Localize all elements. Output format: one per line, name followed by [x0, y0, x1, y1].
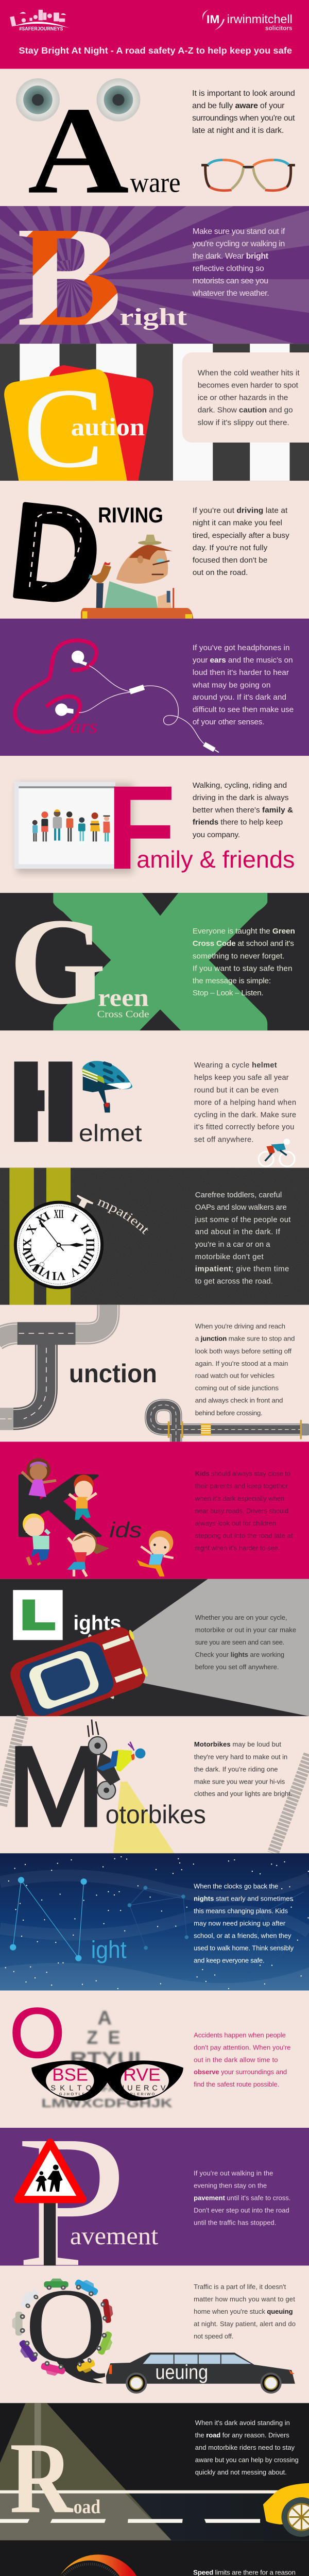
text block: matter how much you want to get — [194, 2295, 295, 2303]
text block: the dark. Wear bright — [193, 252, 269, 261]
blurred eye chart: Z E — [87, 2027, 120, 2048]
text block: nights start early and sometimes — [194, 1894, 293, 1902]
text block: If you've got headphones in — [193, 643, 289, 652]
heading: Lights — [13, 1590, 121, 1640]
text block: stepping out into the road late at — [195, 1532, 293, 1539]
heading: Impatient — [48, 1179, 148, 1257]
text block: driving in the dark is always — [193, 793, 289, 802]
text block: near busy roads. Drivers should — [195, 1507, 288, 1515]
icon: clock: X — [24, 1223, 40, 1236]
text block: you're cycling or walking in — [193, 240, 285, 248]
text block: not speed off. — [194, 2332, 233, 2340]
text block: Traffic is a part of life, it doesn't — [194, 2283, 286, 2291]
logo: irwinmitchell: IM — [207, 13, 219, 26]
constellation: N — [10, 1877, 304, 1973]
heading: Lights: ights — [73, 1611, 121, 1635]
icon: clock: V — [67, 1264, 81, 1279]
text block: When the clocks go back the — [194, 1882, 278, 1890]
icon: cycle helmet — [82, 1061, 132, 1112]
text block — [192, 643, 294, 726]
text block: impatient; give them time — [195, 1265, 289, 1274]
heading: Bright — [17, 197, 187, 356]
heading: Green Cross Code: reen — [98, 984, 149, 1011]
text block: until the traffic has stopped. — [194, 2219, 276, 2226]
panel: L lights — [0, 1579, 309, 1729]
text block: day. If you're not fully — [193, 544, 268, 552]
text block: Make sure you stand out if — [193, 227, 285, 236]
text block: Check your lights are working — [195, 1651, 284, 1658]
text block — [192, 227, 285, 298]
text block: Motorbikes may be loud but — [194, 1740, 281, 1748]
panel: Q queuing — [0, 2266, 309, 2403]
logo: safer journeys — [10, 10, 70, 32]
heading: Driving: RIVING — [98, 503, 163, 527]
text block: school, or at a friends, when they — [194, 1932, 291, 1940]
text block: Don't ever step out into the road — [194, 2207, 289, 2214]
text block — [194, 2031, 290, 2088]
icon: clock — [14, 1201, 104, 1289]
text block: motorbike don't get — [195, 1253, 264, 1261]
illustration: roads — [0, 1305, 307, 1442]
text block: night it can make you feel — [193, 519, 282, 528]
heading: Caution — [23, 365, 145, 492]
text block: you're in a car or on a — [195, 1241, 270, 1249]
heading: Road: R — [10, 2422, 74, 2535]
icon: clock: XII — [54, 1208, 64, 1221]
icon: clock: XI — [34, 1209, 53, 1227]
text block: road watch out for vehicles — [195, 1372, 274, 1380]
text block: quickly and not messing about. — [195, 2468, 287, 2476]
text block: observe your surroundings and — [194, 2068, 287, 2076]
text block: Walking, cycling, riding and — [193, 781, 287, 790]
heading: Pavement: P — [16, 2097, 127, 2307]
text block — [194, 1882, 294, 1964]
illustration: seven people — [32, 809, 110, 841]
icon: cat-eye glasses with sharp text: PLERIWO — [130, 2092, 154, 2096]
heading: Lights: L — [21, 1594, 55, 1637]
text block: look both ways before setting off — [195, 1347, 291, 1355]
panel: C caution — [0, 344, 309, 492]
callout: becomes even harder to spot — [198, 381, 299, 390]
icon: cyclist — [259, 1139, 295, 1166]
heading: Night: ight — [91, 1937, 127, 1963]
icon: clock: II — [78, 1222, 94, 1237]
icon: clock: VII — [32, 1261, 55, 1282]
text block — [194, 2283, 296, 2340]
heading: Kids: K — [12, 1457, 101, 1555]
heading: ueuing: ueuing — [156, 2361, 208, 2383]
callout — [182, 352, 309, 443]
heading: Motorbikes: otorbikes — [106, 1800, 206, 1829]
panel: B bright — [0, 206, 309, 344]
text block: this means changing plans. Kids — [194, 1907, 288, 1914]
icon: cat-eye glasses with sharp text: IUERCV — [122, 2084, 166, 2092]
heading: Helmet: elmet — [79, 1120, 142, 1146]
text block: night when it's harder to see. — [195, 1544, 280, 1552]
icon: clock: IX — [21, 1238, 35, 1251]
title: Stay Bright At Night - A road safety A-Z to help keep you safe — [19, 45, 292, 56]
text block: reflective clothing so — [193, 264, 264, 273]
illustration: headlight on road — [0, 2403, 309, 2540]
text block: out in the dark allow time to — [194, 2056, 278, 2063]
heading: Green Cross Code: G — [9, 893, 106, 1030]
icon: clock: III — [83, 1238, 97, 1252]
panel: P pavement — [0, 2097, 309, 2307]
text block: round but it can be even — [194, 1086, 279, 1094]
illustration: ring of cars — [12, 2276, 115, 2378]
text block: Accidents happen when people — [194, 2031, 286, 2039]
heading: Road: oad — [74, 2496, 100, 2518]
text block: behind before crossing. — [195, 1409, 263, 1417]
text block: whatever the weather. — [192, 289, 269, 298]
logo: irwinmitchell: solicitors — [265, 25, 293, 32]
blurred eye chart: LMWXCDFGHJK — [41, 2096, 173, 2110]
icon: clock: VI — [52, 1269, 65, 1282]
icon: cat-eye glasses with sharp text — [31, 2060, 183, 2100]
text block: a junction make sure to stop and — [195, 1335, 295, 1343]
panel: J junction — [0, 1305, 309, 1442]
heading: Driving: D — [4, 475, 107, 633]
heading letter Q: Q — [25, 2267, 107, 2385]
icon: cat-eye glasses with sharp text: RVE — [123, 2065, 161, 2085]
text block: to get across the road. — [195, 1278, 273, 1286]
heading: Aware — [28, 81, 181, 220]
header — [0, 0, 309, 69]
heading: Helmet: H — [8, 1042, 79, 1165]
text block: Everyone is taught the Green — [193, 927, 295, 936]
text block: Stop – Look – Listen. — [193, 989, 264, 997]
text block: home when you're stuck queuing — [194, 2308, 293, 2315]
text block — [192, 89, 295, 135]
text block: the dark. If you're riding one — [194, 1766, 278, 1773]
text block: cycling in the dark. Make sure — [194, 1111, 296, 1119]
text block — [193, 506, 289, 577]
text block: aware but you can help by crossing — [195, 2456, 299, 2464]
text block: sure you are seen and can see. — [195, 1638, 284, 1646]
text block: of your other senses. — [193, 718, 265, 726]
text block — [193, 781, 293, 839]
text block: and motorbike riders need to stay — [195, 2444, 295, 2451]
logo: irwinmitchell — [202, 10, 293, 32]
text block: pavement until it's safe to cross. — [194, 2194, 290, 2202]
text block: Kids should always stay close to — [195, 1470, 290, 1478]
panel: R road — [0, 2403, 309, 2540]
text block: friends there to help keep — [193, 818, 283, 827]
text block: and keep everyone safe. — [194, 1957, 265, 1964]
text block: When it's dark avoid standing in — [195, 2419, 290, 2427]
panel: S speed — [0, 2540, 309, 2576]
text block: OAPs and slow walkers are — [195, 1204, 287, 1212]
icon: speedometer — [53, 2554, 143, 2576]
text block: tired, especially after a busy — [193, 531, 289, 540]
text block — [195, 1323, 295, 1417]
heading: Green Cross Code: Cross Code — [97, 1009, 149, 1020]
text block: may now need picking up after — [194, 1920, 286, 1927]
text block: before you set off anywhere. — [195, 1663, 279, 1671]
text block: If you want to stay safe then — [193, 964, 292, 973]
heading: Impatient: mpatient — [97, 1199, 148, 1234]
text block: their parents and keep together — [195, 1482, 288, 1490]
text block: difficult to see then make use — [193, 705, 294, 714]
panel: I impatient — [0, 1154, 309, 1325]
heading: Caution: aution — [71, 413, 145, 441]
heading: Motorbikes — [7, 1723, 206, 1850]
text block: out on the road. — [193, 568, 248, 577]
heading: Caution: C — [23, 365, 104, 492]
stars — [6, 1857, 308, 1989]
callout: dark. Show caution and go — [198, 406, 293, 415]
icon: red and yellow cards — [4, 365, 153, 481]
blurred eye chart: RTYUI — [70, 2049, 141, 2069]
text block: and be fully aware of your — [192, 101, 285, 110]
text block: focused then don't be — [193, 556, 267, 565]
text block: when it's dark especially when — [195, 1495, 284, 1502]
text block: Wearing a cycle helmet — [194, 1061, 277, 1070]
heading: Impatient: I — [48, 1179, 103, 1257]
panel: D driving — [0, 475, 309, 633]
heading: Helmet — [8, 1042, 142, 1165]
icon: eyes — [16, 78, 140, 122]
text block: set off anywhere. — [194, 1136, 253, 1144]
text block: again. If you're stood at a main — [195, 1360, 288, 1367]
logo: irwinmitchell: irwinmitchell — [227, 12, 293, 26]
panel: K kids — [0, 1442, 309, 1579]
heading: Pavement: avement — [70, 2222, 159, 2250]
panel: F family and friends — [0, 756, 309, 894]
icon: road sign — [18, 2142, 83, 2266]
text block: surroundings when you're out — [192, 114, 295, 123]
icon: green cross — [53, 893, 267, 1030]
panel: H helmet — [0, 1030, 309, 1168]
text block — [195, 1614, 296, 1671]
icon: clock: I — [69, 1211, 80, 1225]
text block: the road for any reason. Drivers — [195, 2431, 289, 2439]
logo: safer journeys: #SAFERJOURNEYS — [19, 26, 63, 32]
heading: Bright: right — [119, 304, 187, 330]
text block: what may be going on — [192, 681, 270, 689]
picture frame — [14, 782, 133, 874]
heading: Kids: ids — [109, 1518, 142, 1542]
panel: E ears — [0, 619, 309, 756]
text block: evening then stay on the — [194, 2182, 267, 2190]
heading: Family and friends: F — [107, 761, 176, 894]
illustration: motorbike — [88, 1720, 145, 1799]
text block — [194, 1061, 296, 1144]
text block: If you're out walking in the — [194, 2170, 273, 2177]
icon: glasses — [201, 160, 295, 191]
text block: late at night and it is dark. — [192, 126, 284, 135]
heading letter O: O — [10, 1994, 65, 2072]
icon: cat-eye glasses with sharp text: GJHOTLE — [59, 2092, 85, 2096]
icon: clock: VIII — [20, 1247, 43, 1274]
callout: When the cold weather hits it — [198, 369, 300, 377]
icon: cat-eye glasses with sharp text: BSE — [52, 2065, 88, 2085]
blurred eye chart: A — [97, 2008, 112, 2029]
text block: don't pay attention. When you're — [194, 2043, 290, 2051]
text block: more of a helping hand when — [194, 1098, 296, 1107]
heading: Family and friends: amily & friends — [136, 846, 295, 873]
text block: make sure you wear your hi-vis — [194, 1778, 285, 1785]
heading: Ears: ars — [70, 717, 97, 738]
heading: Bright: B — [17, 197, 122, 356]
illustration: children — [22, 1458, 174, 1577]
text block: and always check in front and — [195, 1397, 283, 1404]
text block: loud then it's harder to hear — [193, 668, 289, 677]
text block: Carefree toddlers, careful — [195, 1191, 282, 1199]
text block: they're very hard to make out in — [194, 1753, 287, 1760]
text block: you company. — [193, 831, 240, 839]
text block — [195, 2419, 299, 2476]
heading: Kids — [12, 1457, 142, 1555]
heading: Aware: ware — [130, 167, 181, 198]
heading: Junction: unction — [69, 1359, 157, 1388]
text block: better when there's family & — [193, 806, 293, 815]
callout: slow if it's slippy out there. — [198, 418, 289, 427]
panel: N night — [0, 1853, 309, 1991]
illustration: car from above — [6, 1620, 152, 1729]
text block: clothes and your lights are bright. — [194, 1790, 292, 1798]
text block: Cross Code at school and it's — [193, 939, 294, 948]
text block — [195, 1191, 290, 1286]
tyre tracks — [1, 1716, 309, 1853]
text block: motorbike or out in your car make — [195, 1626, 296, 1634]
text block: it's fitted correctly before you — [194, 1123, 294, 1131]
headlight beam — [129, 1579, 309, 1716]
panel: M motorbikes — [0, 1716, 309, 1853]
text block: your ears and the music's on — [193, 656, 293, 665]
panel: G green cross code — [0, 893, 309, 1030]
headlight beam — [113, 1782, 175, 1853]
icon: headphones — [55, 651, 219, 752]
text block: something to never forget. — [193, 952, 285, 960]
text block: When you're driving and reach — [195, 1323, 285, 1330]
text block: used to walk home. Think sensibly — [194, 1944, 294, 1952]
callout: ice or other hazards in the — [198, 394, 288, 402]
illustration: limousine — [106, 2352, 295, 2394]
blurred eye chart: HFXK — [96, 2083, 121, 2094]
heading: Ears — [15, 640, 97, 738]
text block — [193, 927, 295, 997]
text block: helps keep you safe all year — [194, 1074, 289, 1082]
text block: just some of the people out — [195, 1216, 290, 1224]
text block: find the safest route possible. — [194, 2080, 279, 2088]
blurred eye chart — [41, 2008, 173, 2110]
text block: at night. Stay patient, alert and do — [194, 2320, 296, 2328]
text block — [194, 1740, 292, 1798]
heading: Aware: A — [28, 81, 129, 220]
text block — [195, 1470, 293, 1552]
icon: cat-eye glasses with sharp text: ISKLTO — [44, 2084, 92, 2092]
text block: motorists can see you — [193, 277, 268, 285]
text block — [194, 2170, 290, 2226]
heading: Family and friends — [107, 761, 295, 894]
text block: and about in the dark. If — [195, 1228, 281, 1236]
text block: coming out of side junctions — [195, 1384, 279, 1392]
text block: the message is simple: — [193, 977, 271, 985]
text block: always look out for children — [195, 1519, 276, 1527]
panel: O observe — [0, 1991, 309, 2108]
panel: A aware — [0, 69, 309, 220]
text block: It is important to look around — [192, 89, 295, 98]
text block: around you. If it's dark and — [193, 693, 286, 702]
illustration: tired driver — [81, 535, 193, 619]
text block: Speed limits are there for a reason — [193, 2568, 296, 2576]
text block: Whether you are on your cycle, — [195, 1614, 287, 1621]
icon: clock: IIII — [75, 1249, 96, 1272]
text block: If you're out driving late at — [193, 506, 288, 515]
heading: Motorbikes: M — [7, 1723, 106, 1850]
